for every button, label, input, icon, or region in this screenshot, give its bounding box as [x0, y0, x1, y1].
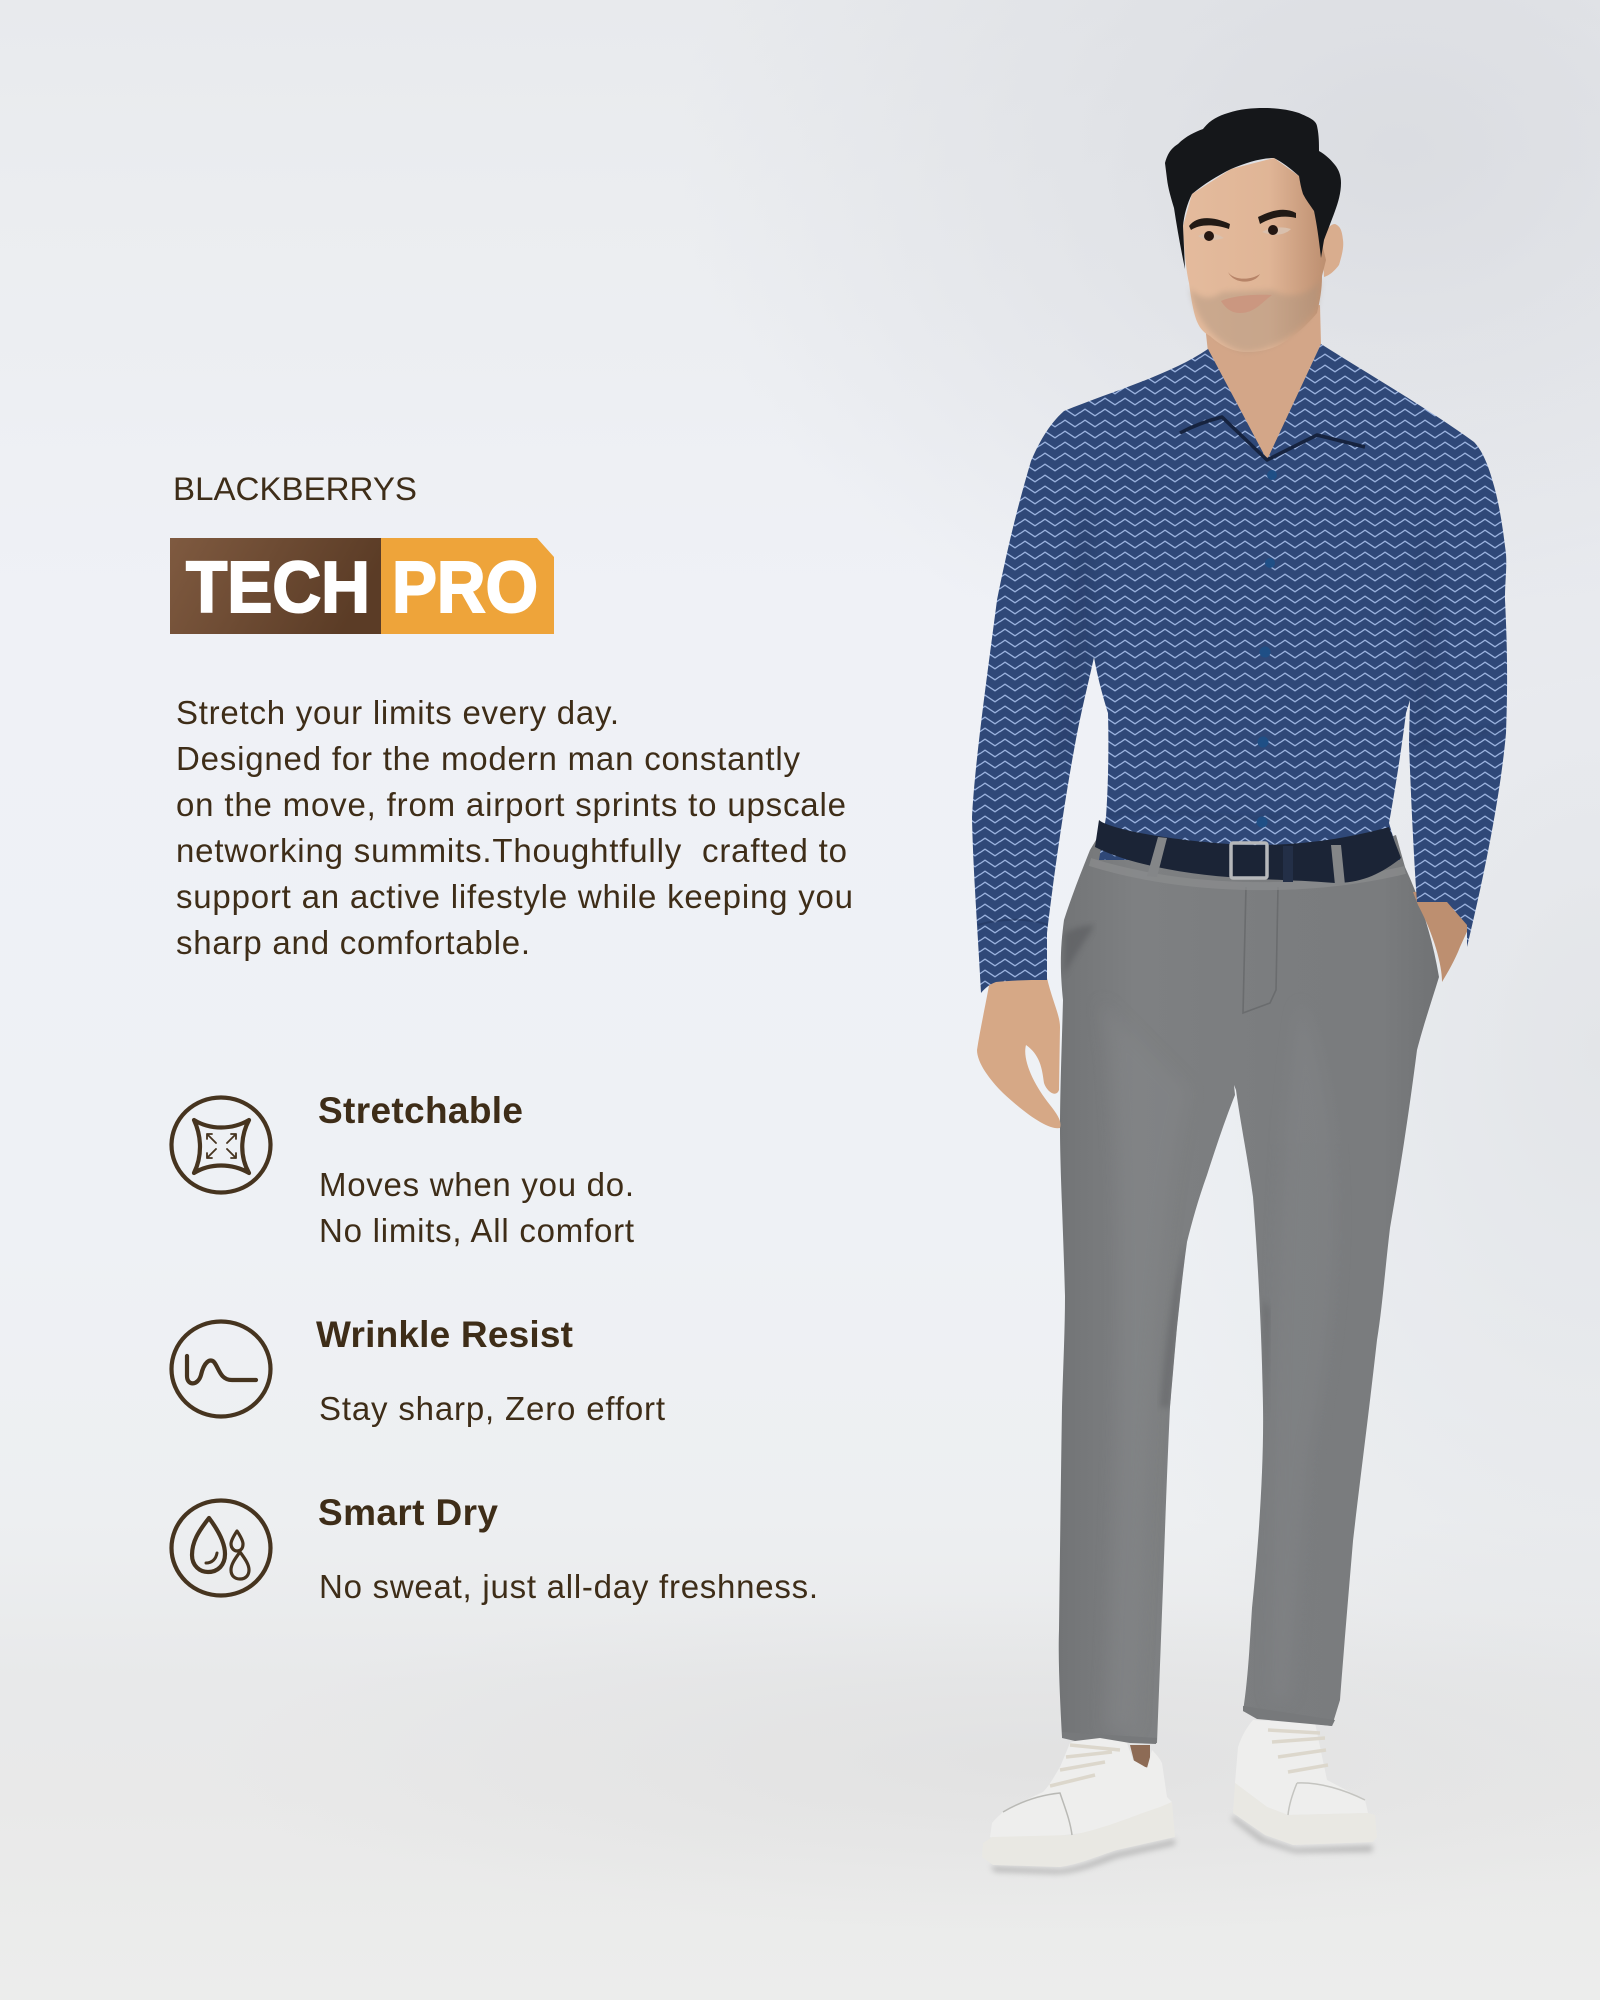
right shoe — [1233, 1720, 1377, 1845]
icon: water drops — [172, 1500, 270, 1596]
stubble — [1190, 278, 1321, 352]
right hand in pocket — [1413, 892, 1470, 982]
left hand — [977, 976, 1061, 1128]
intro paragraph: sharp and comfortable. — [176, 924, 530, 961]
intro paragraph: Stretch your limits every day. — [176, 694, 619, 731]
shirt buttons — [1256, 470, 1277, 828]
description: Stretchable: Moves when you do. — [319, 1166, 634, 1203]
photo: male model in shirt and trousers — [972, 108, 1507, 1874]
logo: brown panel — [170, 538, 381, 634]
intro paragraph: on the move, from airport sprints to upscale — [176, 786, 846, 823]
logo: orange panel with clipped corner — [381, 538, 554, 634]
trousers — [1059, 835, 1439, 1743]
neck — [1205, 305, 1321, 462]
face — [1183, 158, 1326, 352]
intro paragraph — [176, 694, 853, 961]
description: Stretchable: No limits, All comfort — [319, 1212, 634, 1249]
collar — [1180, 344, 1365, 460]
description: Stretchable — [319, 1166, 634, 1249]
ear — [1322, 224, 1343, 277]
intro paragraph: Designed for the modern man constantly — [176, 740, 800, 777]
belt keeper — [1283, 846, 1293, 882]
logo word: PRO: PRO — [392, 548, 538, 628]
logo word: TECH: TECH — [186, 548, 370, 628]
nose — [1228, 272, 1260, 282]
lips — [1221, 295, 1272, 313]
heading: Stretchable: Stretchable — [318, 1090, 523, 1131]
description: Wrinkle Resist: Stay sharp, Zero effort — [319, 1390, 665, 1427]
eyes — [1198, 225, 1291, 241]
feature: Wrinkle Resist — [172, 1314, 665, 1427]
head — [1165, 108, 1343, 352]
heading: Smart Dry: Smart Dry — [318, 1492, 498, 1533]
logo: Tech Pro badge — [170, 538, 554, 634]
floor shadows under shoes — [990, 1815, 1373, 1874]
shirt — [972, 344, 1507, 993]
trouser hems over shoes — [1062, 1706, 1335, 1744]
eyebrows — [1189, 210, 1296, 230]
belt buckle — [1231, 843, 1267, 878]
brand name: BLACKBERRYS — [173, 471, 417, 507]
left shoe — [982, 1737, 1175, 1867]
description: Smart Dry: No sweat, just all-day freshness. — [319, 1568, 818, 1605]
heading: Wrinkle Resist: Wrinkle Resist — [316, 1314, 573, 1355]
hair — [1165, 108, 1341, 269]
icon: stretch fabric — [172, 1098, 270, 1192]
icon: wrinkle wave — [172, 1322, 270, 1416]
feature: Smart Dry — [172, 1492, 818, 1605]
belt — [1095, 820, 1401, 885]
belt loops — [1147, 837, 1345, 885]
feature: Stretchable — [172, 1090, 634, 1249]
intro paragraph: networking summits.Thoughtfully crafted to — [176, 832, 847, 869]
intro paragraph: support an active lifestyle while keeping you — [176, 878, 853, 915]
